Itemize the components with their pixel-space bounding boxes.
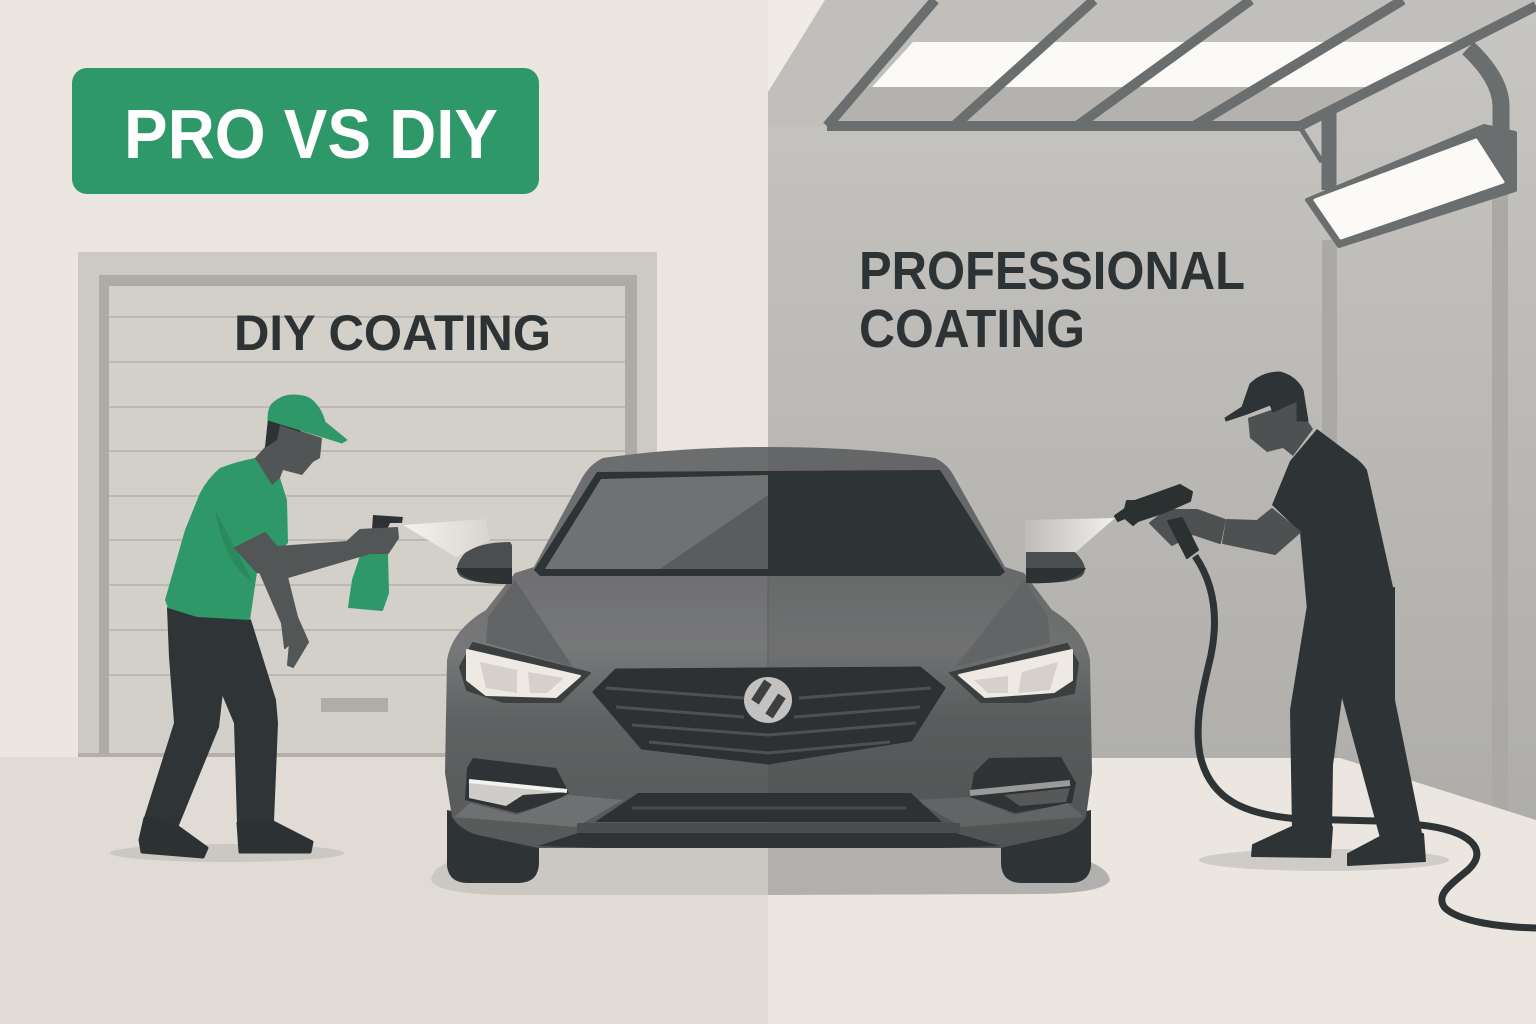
- heading: professional coating: [859, 241, 1245, 359]
- arm and glove: [1150, 509, 1300, 554]
- car shadow: [431, 840, 1110, 895]
- light support rail: [1300, 48, 1501, 190]
- pants: [145, 608, 277, 825]
- heading: DIY coating: DIY COATING: [234, 305, 551, 361]
- shoes: [1252, 827, 1332, 857]
- background: DIY side floor: [0, 757, 768, 1024]
- car: badge: [744, 677, 792, 723]
- car: windshield: [534, 470, 1005, 576]
- cap: [1225, 372, 1308, 421]
- background: DIY side wall: [0, 0, 768, 760]
- professional person: [1025, 372, 1536, 928]
- person shadow right: [1199, 849, 1449, 871]
- spray bottle: [349, 515, 403, 610]
- wall posts: [1322, 190, 1508, 815]
- spray mist left: [403, 519, 490, 557]
- torso: [1272, 429, 1395, 610]
- far arm: [260, 572, 308, 667]
- spray gun: [1115, 485, 1198, 558]
- car: lower bumper: [454, 793, 1084, 848]
- ceiling with light panels: [768, 0, 1536, 126]
- car: [445, 447, 1092, 883]
- title badge: PRO VS DIY: [72, 68, 539, 194]
- neck and face: [1248, 401, 1313, 456]
- garage door: [78, 252, 657, 757]
- green cap: [268, 395, 347, 443]
- neck and face: [255, 420, 322, 485]
- shirt fold: [215, 510, 253, 582]
- pants: [1290, 587, 1423, 838]
- near arm: [235, 528, 398, 577]
- title badge: PRO VS DIY: PRO VS DIY: [124, 95, 498, 173]
- spray mist right: [1025, 518, 1115, 552]
- car: mirrors: [456, 542, 1086, 584]
- heading: professional coating: COATING: [859, 299, 1085, 359]
- car: grille: [594, 668, 944, 763]
- background: professional side wall: [768, 0, 1536, 826]
- heading: professional coating: PROFESSIONAL: [859, 241, 1245, 301]
- car: right half shade: [445, 447, 1092, 848]
- overhead work light: [1307, 126, 1515, 246]
- shoes: [140, 818, 207, 857]
- car: headlights: [460, 643, 1078, 702]
- DIY person: [140, 395, 490, 857]
- car: body: [445, 447, 1092, 848]
- background: professional side floor: [768, 758, 1536, 1024]
- car: wheels: [447, 810, 1091, 883]
- car: hood side panels: [486, 580, 1050, 667]
- torso shirt: [165, 458, 288, 620]
- car: center seam: [767, 576, 769, 670]
- person shadow left: [110, 844, 344, 862]
- hair: [265, 418, 302, 448]
- car: lower intakes: [465, 757, 1076, 813]
- hose: [1195, 556, 1536, 928]
